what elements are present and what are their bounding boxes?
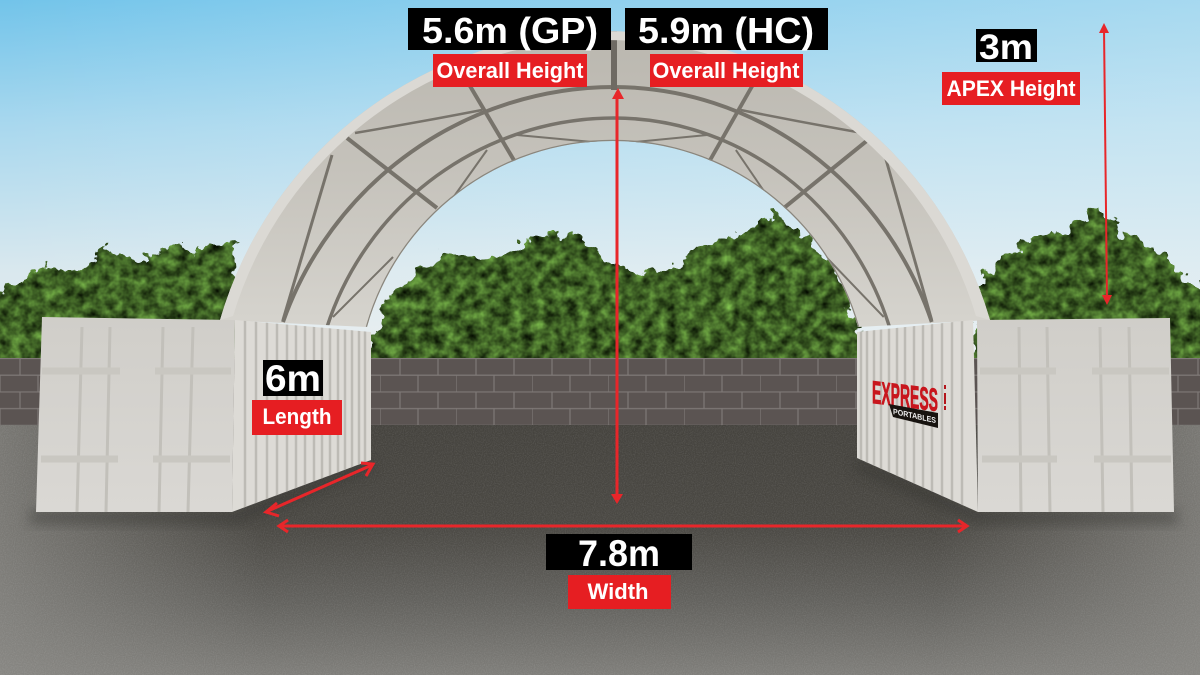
- label: 5.6m GP overall height: 5.6m (GP): [422, 10, 598, 51]
- label: 6m length: 6m: [265, 358, 321, 399]
- logo mark: [944, 385, 946, 410]
- left container doors: [36, 317, 235, 512]
- arrow: apex height: [1099, 23, 1112, 305]
- label: 6m length: [252, 358, 342, 435]
- logo band: [889, 404, 938, 428]
- right door bars: [1019, 327, 1132, 512]
- logo: Express Portables: [872, 374, 945, 428]
- right door bands: [980, 371, 1171, 459]
- infographic: dome shelter dimensions: EXPRESS: [872, 374, 938, 418]
- left container side corrugation: [244, 320, 366, 508]
- trees behind the wall: [0, 208, 1200, 370]
- logo small text: PORTABLES: [893, 407, 937, 425]
- label: 3m apex height: APEX Height: [946, 76, 1076, 101]
- left door bands: [41, 371, 231, 459]
- ground: [0, 425, 1200, 675]
- brick wall: [0, 358, 1200, 426]
- label: 7.8m width: [546, 533, 692, 609]
- left container side: [232, 320, 371, 512]
- label: 5.6m GP overall height: Overall Height: [436, 58, 584, 83]
- label: 5.9m HC overall height: [625, 8, 828, 87]
- right container side: [857, 320, 978, 512]
- label: 5.6m GP overall height: [408, 8, 611, 87]
- sky background: [0, 0, 1200, 360]
- label: 7.8m width: Width: [588, 579, 648, 604]
- arrow: length: [266, 463, 373, 516]
- label: 3m apex height: 3m: [979, 28, 1033, 67]
- arrow: width: [279, 520, 967, 532]
- label: 5.9m HC overall height: Overall Height: [652, 58, 800, 83]
- arch outer rim: [220, 31, 990, 320]
- right container side corrugation: [860, 321, 964, 506]
- arch interior panels: [220, 31, 990, 327]
- right container doors: [977, 318, 1174, 512]
- left door bars: [77, 327, 193, 512]
- right container: [857, 318, 1174, 512]
- label: 3m apex height: [942, 28, 1080, 105]
- left container: [36, 317, 371, 512]
- container shadows: [30, 458, 1178, 524]
- label: 7.8m width: 7.8m: [578, 533, 660, 574]
- arch ribs and braces: [283, 30, 932, 327]
- label: 5.9m HC overall height: 5.9m (HC): [638, 10, 814, 51]
- dome arch: [220, 30, 990, 327]
- label: 6m length: Length: [262, 404, 332, 429]
- arrow: overall height: [611, 88, 624, 504]
